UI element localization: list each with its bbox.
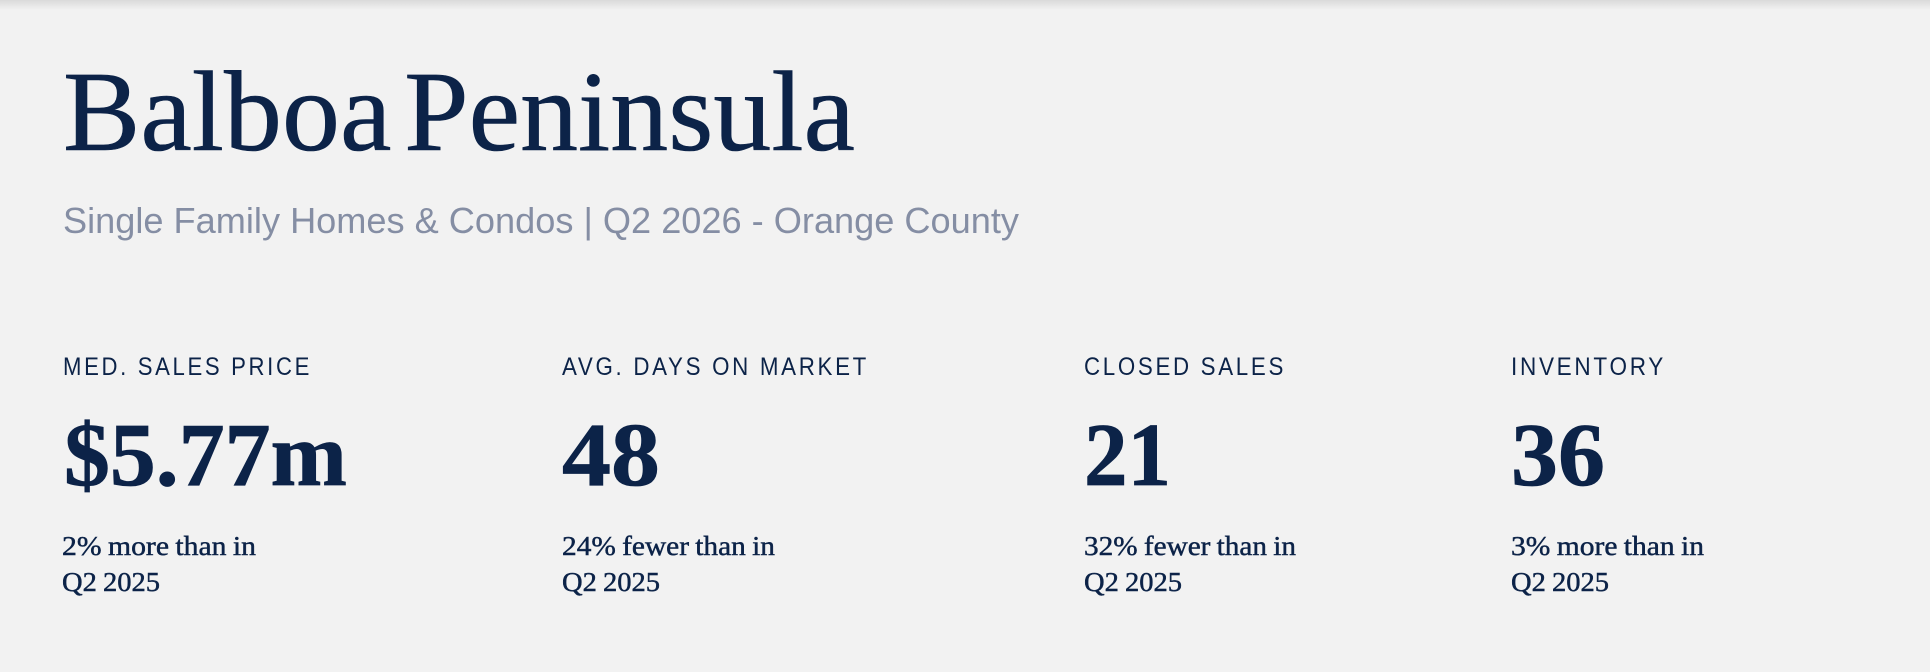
note: closed sales change: 32% fewer than in <box>1084 531 1297 561</box>
panel: inventory <box>1511 353 1705 597</box>
label: inventory: INVENTORY <box>1511 353 1666 381</box>
note: inventory change: Q2 2025 <box>1511 567 1609 597</box>
subtitle: Single Family Homes & Condos | Q2 2026 - Orange County <box>63 200 1019 241</box>
note: closed sales change: Q2 2025 <box>1084 567 1182 597</box>
note: median sales price change: 2% more than in <box>62 531 257 561</box>
note: days on market change: 24% fewer than in <box>562 531 776 561</box>
note: inventory change <box>1511 531 1705 597</box>
panel: closed sales <box>1084 353 1297 597</box>
panel: average days on market <box>562 353 869 597</box>
value: inventory: 36 <box>1511 406 1605 505</box>
note: days on market change: Q2 2025 <box>562 567 660 597</box>
label: average days on market: AVG. DAYS ON MARKET <box>562 353 869 381</box>
value: closed sales: 21 <box>1084 406 1171 505</box>
panel: median sales price <box>62 353 347 597</box>
note: inventory change: 3% more than in <box>1511 531 1705 561</box>
note: days on market change <box>562 531 776 597</box>
note: median sales price change <box>62 531 257 597</box>
note: median sales price change: Q2 2025 <box>62 567 160 597</box>
value: average days on market: 48 <box>562 406 660 505</box>
label: closed sales: CLOSED SALES <box>1084 353 1286 381</box>
title: Balboa Peninsula <box>63 48 855 175</box>
label: median sales price: MED. SALES PRICE <box>63 353 312 381</box>
value: median sales price: $5.77m <box>64 406 347 505</box>
note: closed sales change <box>1084 531 1297 597</box>
